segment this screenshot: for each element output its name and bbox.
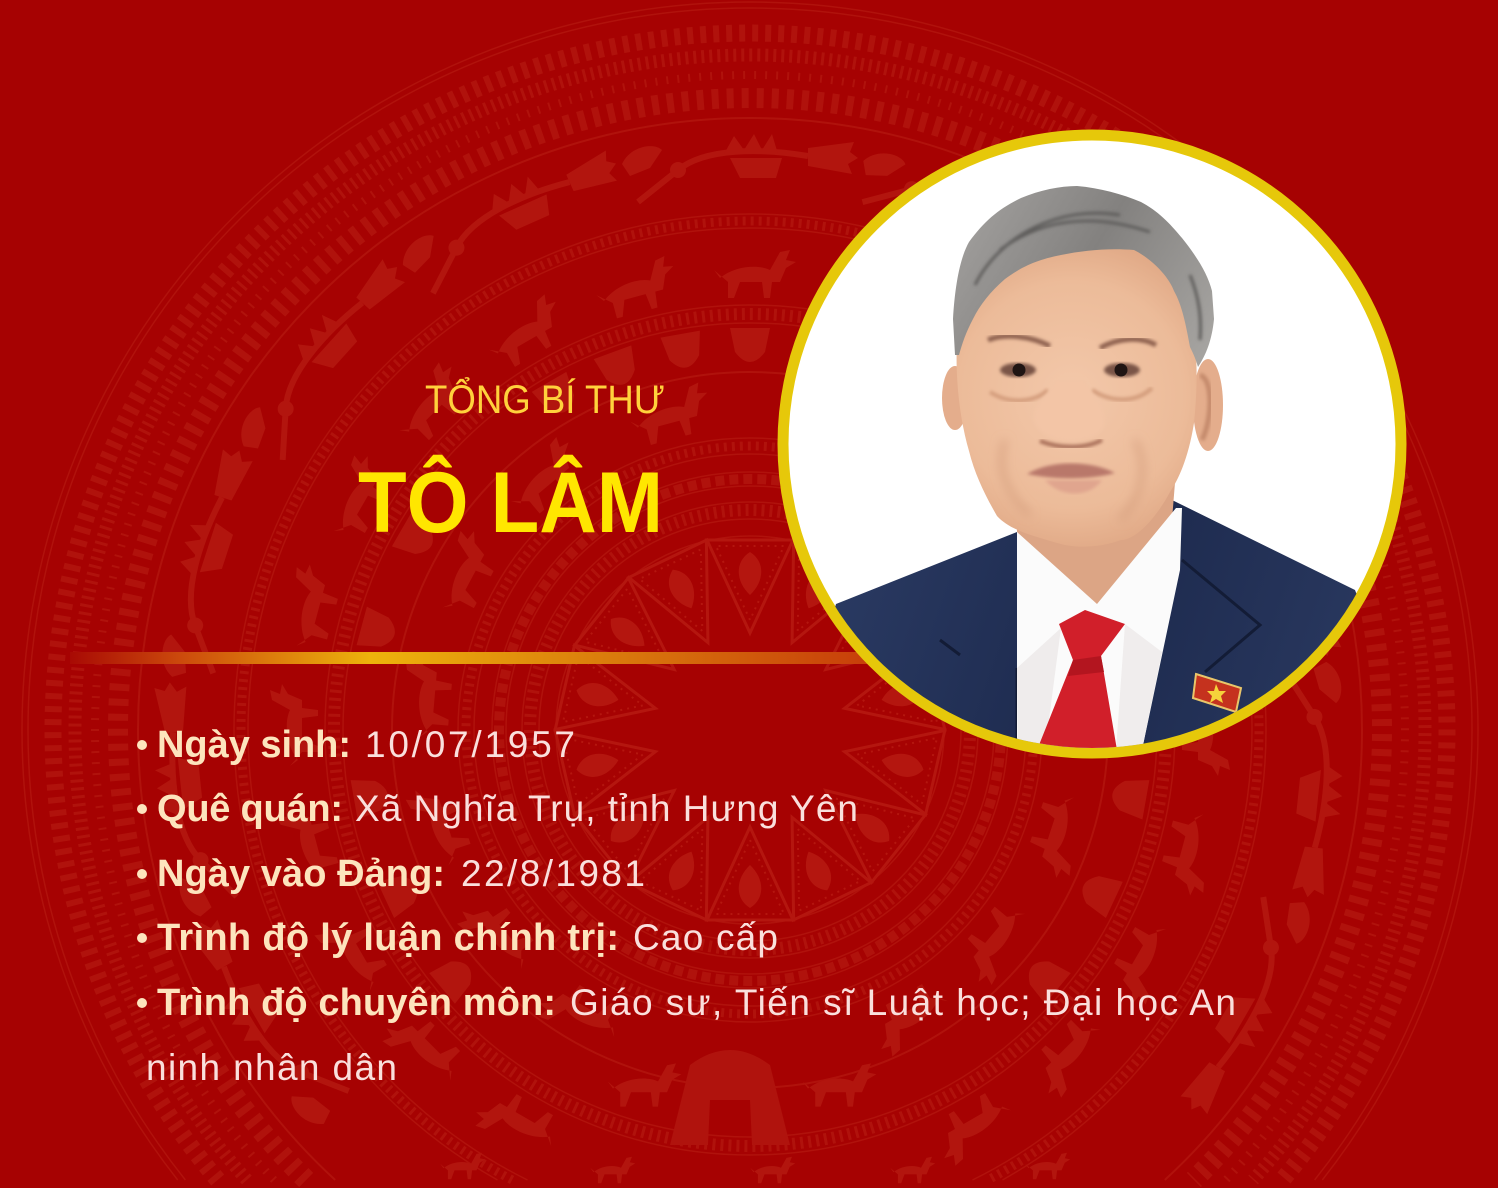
portrait illustration — [835, 186, 1356, 748]
hair — [953, 186, 1214, 367]
eyes — [1000, 363, 1036, 377]
item: hometown: Xã Nghĩa Trụ, tỉnh Hưng Yên — [355, 788, 858, 829]
item: party admission date: 22/8/1981 — [461, 853, 645, 894]
tie knot shade — [1068, 656, 1104, 676]
nose — [1046, 392, 1049, 394]
item: date of birth: 10/07/1957 — [365, 724, 575, 765]
item: political theory level: Trình độ lý luận chính trị: — [157, 917, 619, 959]
shirt — [1017, 508, 1182, 750]
hair strands — [975, 213, 1201, 340]
tie — [1037, 610, 1125, 750]
collar shadow — [1017, 628, 1061, 750]
item: professional qualification — [137, 982, 1236, 1088]
eyebrows — [988, 336, 1050, 346]
lapel pin — [1193, 674, 1241, 712]
item: party admission date — [137, 853, 645, 895]
face — [957, 229, 1197, 547]
item: party admission date: Ngày vào Đảng: — [157, 853, 445, 895]
item: hometown — [137, 788, 858, 830]
ears — [942, 366, 962, 430]
role heading: TỔNG BÍ THƯ — [425, 375, 665, 422]
portrait background circle — [783, 135, 1401, 753]
item: professional qualification: ninh nhân dân — [146, 1047, 397, 1088]
item: date of birth: Ngày sinh: — [157, 724, 351, 766]
portrait in gold ring — [783, 135, 1420, 760]
mouth — [1027, 463, 1115, 478]
lapel lines — [940, 560, 1260, 745]
suit — [835, 500, 1356, 748]
item: hometown: Quê quán: — [157, 788, 343, 830]
under-eye shading — [990, 388, 1152, 400]
item: date of birth — [137, 724, 575, 766]
item: professional qualification: Giáo sư, Tiến sĩ Luật học; Đại học An — [570, 982, 1236, 1023]
item: political theory level: Cao cấp — [633, 917, 778, 958]
item: professional qualification: Trình độ chuyên môn: — [157, 982, 556, 1024]
name heading: TÔ LÂM — [358, 455, 663, 551]
smile and jaw shading — [998, 442, 1146, 510]
biography list — [137, 724, 1236, 1088]
divider line — [70, 652, 870, 664]
neck — [1017, 484, 1175, 604]
